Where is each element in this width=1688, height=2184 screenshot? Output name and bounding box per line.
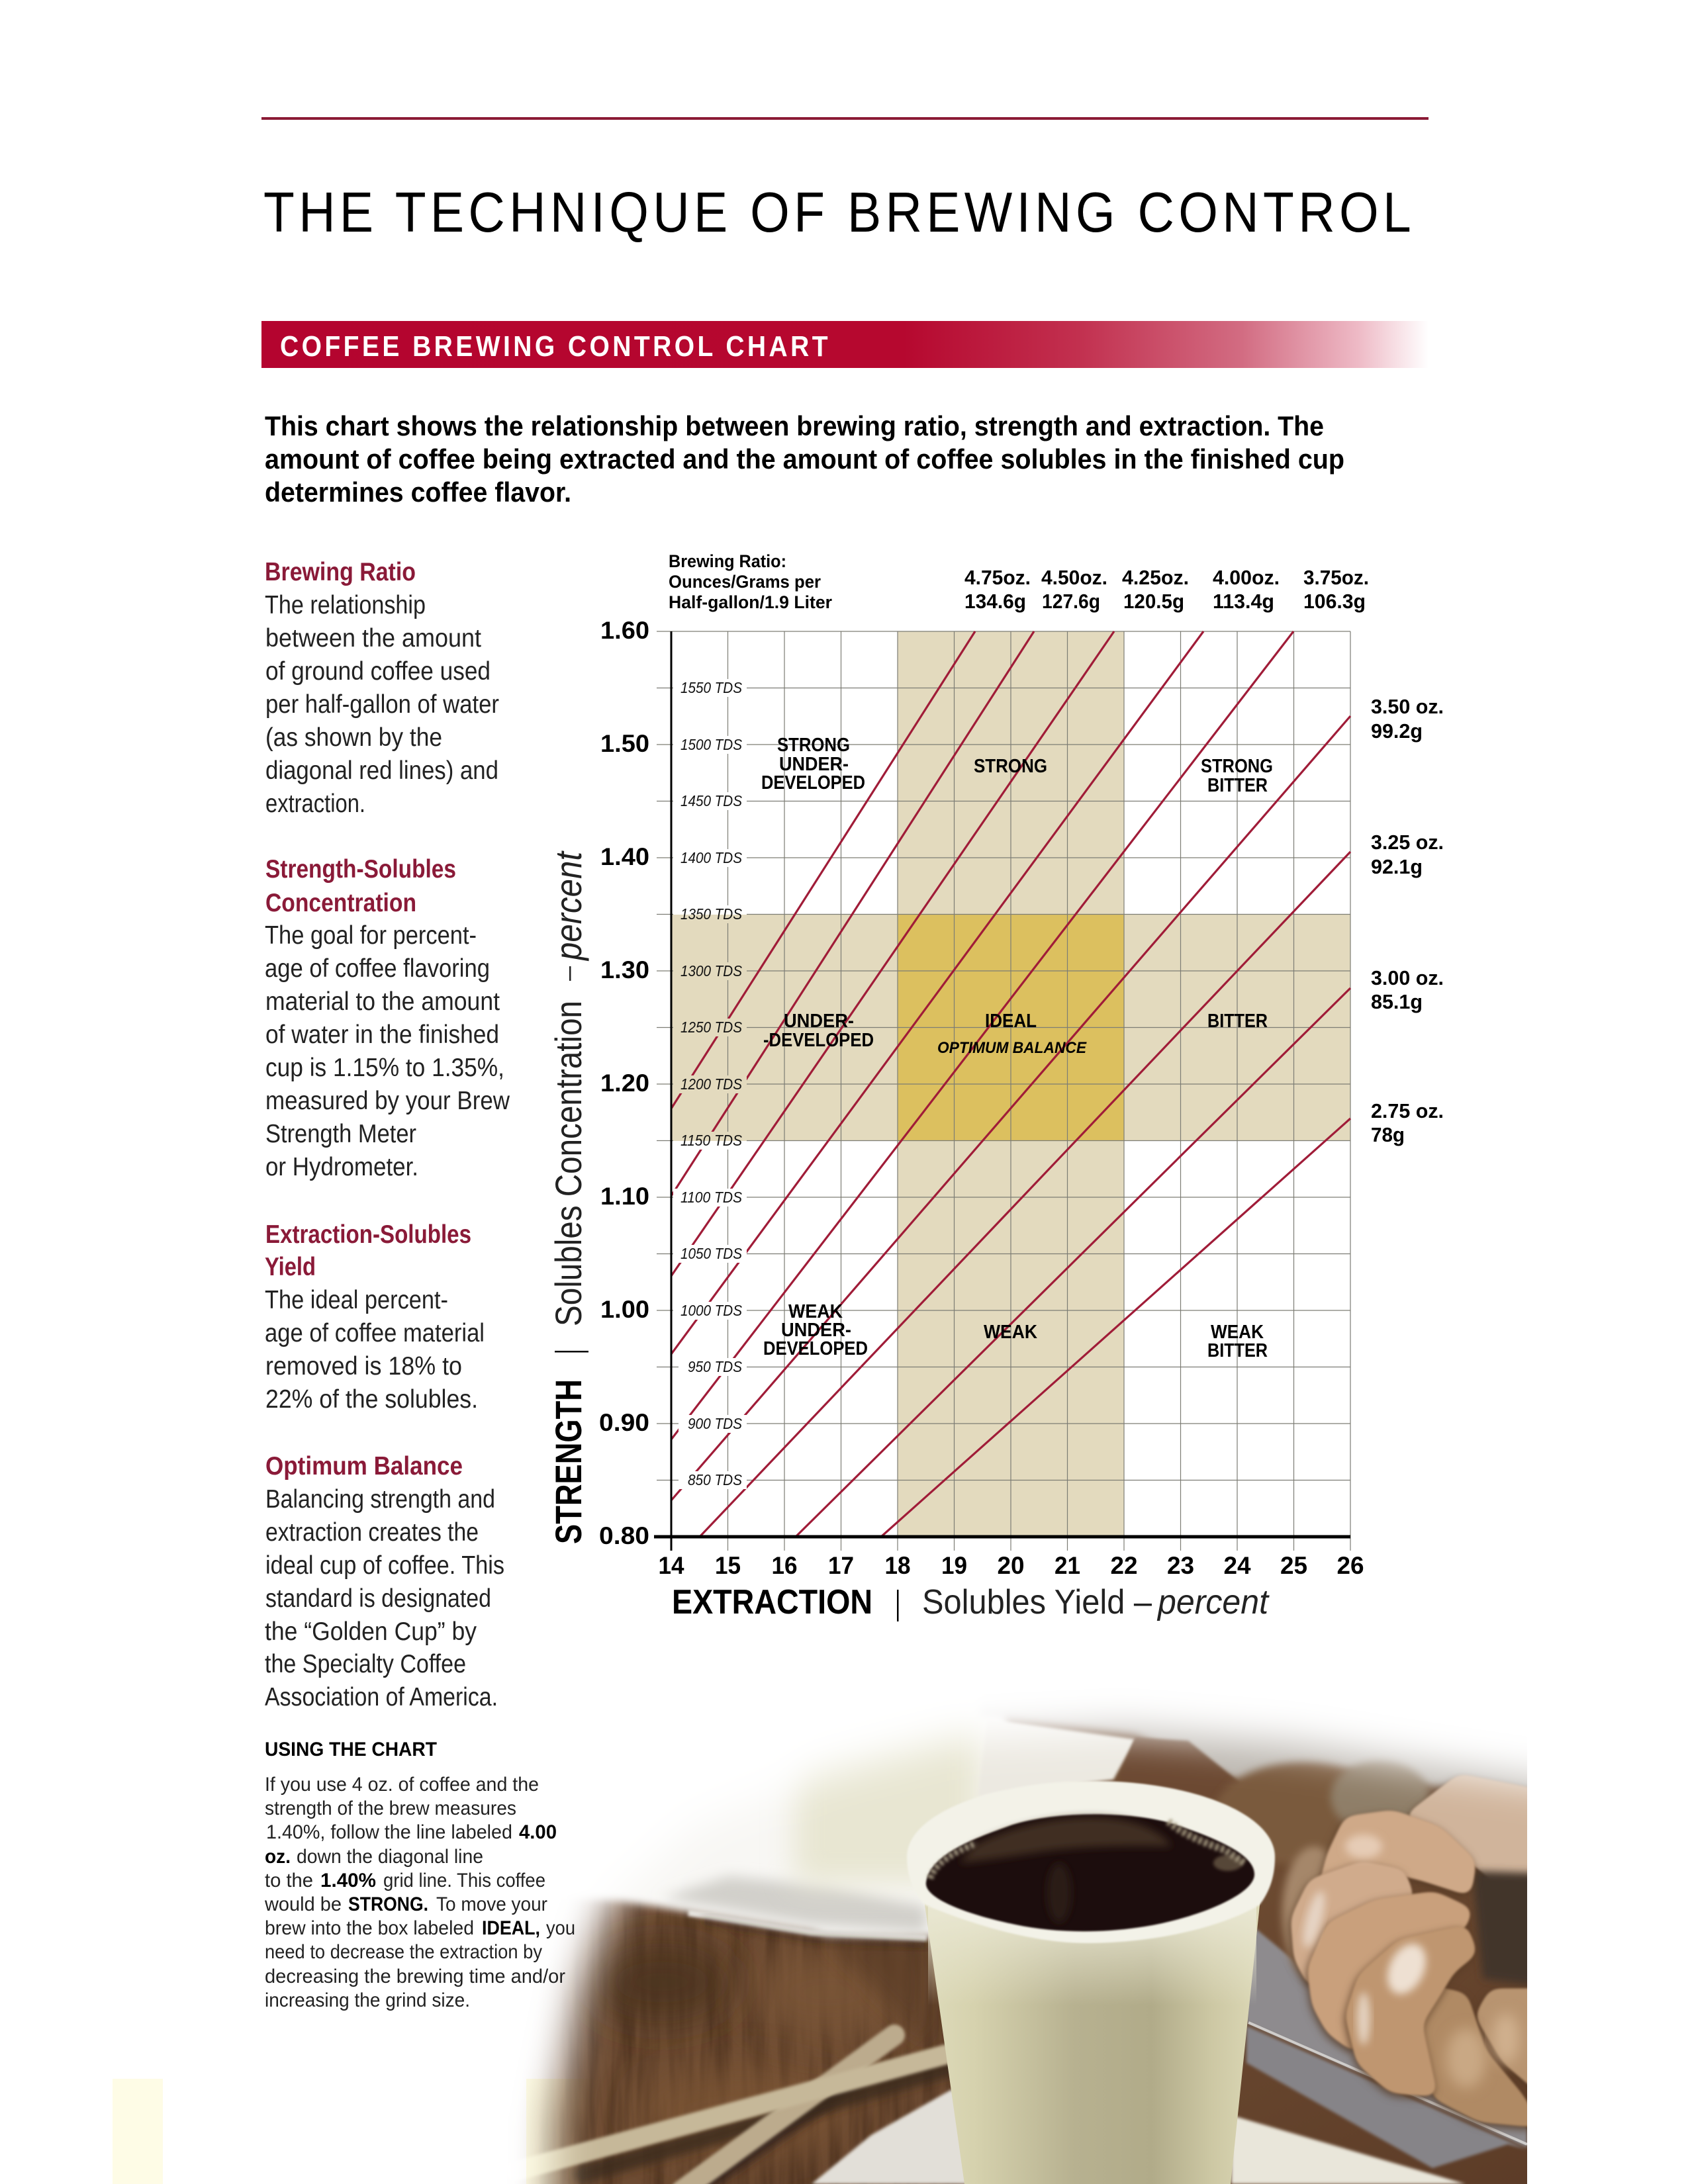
chart: extraction axis values: 21 bbox=[1055, 1552, 1080, 1579]
top rule bbox=[261, 117, 1429, 120]
photo: rear napkin bbox=[986, 1721, 1135, 1794]
chart: zone labels bbox=[761, 735, 1273, 1361]
instructions paragraph: increasing the grind size. bbox=[265, 1989, 470, 2011]
chart: right ratio labels: 3.00 oz. bbox=[1371, 966, 1444, 989]
heading: USING THE CHART bbox=[265, 1739, 437, 1760]
text block: optimum balance: standard is designated bbox=[265, 1584, 491, 1613]
chart: x axis title: percent bbox=[1156, 1583, 1270, 1621]
text block: extraction-solubles yield: 22% of the solubles. bbox=[265, 1385, 478, 1414]
chart: x axis title bbox=[672, 1583, 1270, 1621]
using the chart bbox=[264, 1739, 575, 2011]
chart: extraction axis values: 16 bbox=[772, 1552, 797, 1579]
chart: TDS scale labels: 1250 TDS bbox=[680, 1019, 743, 1036]
instructions paragraph: STRONG. bbox=[348, 1893, 428, 1915]
chart: TDS scale labels: 1550 TDS bbox=[680, 679, 743, 696]
instructions paragraph: oz. bbox=[265, 1846, 291, 1868]
cup rim bbox=[907, 1781, 1275, 1943]
chart: strength axis values: 1.20 bbox=[600, 1069, 649, 1097]
instructions paragraph: 1.40%, follow the line labeled bbox=[266, 1821, 512, 1843]
intro paragraph: amount of coffee being extracted and the amount of coffee solubles in the finished cup bbox=[265, 443, 1344, 475]
instructions paragraph: grid line. This coffee bbox=[383, 1870, 545, 1891]
photo: front glazed donut bbox=[1291, 1774, 1549, 2128]
chart: right ratio labels: 3.25 oz. bbox=[1371, 831, 1444, 854]
zone: under-developed bbox=[763, 1011, 874, 1051]
chart: extraction axis values: 25 bbox=[1280, 1552, 1307, 1579]
chart: strength axis values: 1.10 bbox=[600, 1183, 649, 1210]
instructions paragraph: need to decrease the extraction by bbox=[265, 1941, 542, 1963]
zone: strong under-developed: DEVELOPED bbox=[761, 772, 865, 794]
zone: weak under-developed: WEAK bbox=[788, 1301, 843, 1322]
text block: brewing ratio: extraction. bbox=[265, 790, 365, 818]
instructions paragraph: brew into the box labeled bbox=[265, 1917, 474, 1939]
chart: y axis title: STRENGTH bbox=[547, 1379, 589, 1544]
chart: extraction axis values: 24 bbox=[1223, 1552, 1251, 1579]
chart: extraction axis values: 20 bbox=[997, 1552, 1025, 1579]
chart: strength axis values: 0.80 bbox=[599, 1522, 649, 1549]
text block: strength-solubles concentration: or Hydrometer. bbox=[265, 1153, 418, 1181]
text block: optimum balance: extraction creates the bbox=[265, 1518, 479, 1547]
zone: strong bitter: BITTER bbox=[1207, 775, 1268, 796]
photo: stir sticks bbox=[516, 2035, 947, 2184]
text block: strength-solubles concentration: cup is 1.15% to 1.35%, bbox=[265, 1054, 504, 1082]
text block: strength-solubles concentration: Strength-Solubles bbox=[265, 855, 456, 884]
chart: top ratio labels: 4.25oz. bbox=[1122, 566, 1189, 589]
chart: strength axis values bbox=[599, 617, 649, 1549]
chart: top ratio labels: 4.75oz. bbox=[964, 566, 1031, 589]
instructions paragraph: 4.00 bbox=[519, 1821, 557, 1843]
zone: ideal: OPTIMUM BALANCE bbox=[937, 1039, 1087, 1057]
text block: extraction-solubles yield: Yield bbox=[265, 1253, 316, 1281]
chart: y axis title: percent bbox=[547, 850, 589, 962]
section banner: coffee brewing control chart bbox=[261, 321, 1429, 368]
photo: back napkin and saucer bbox=[585, 1715, 1008, 1948]
text block: optimum balance bbox=[265, 1452, 504, 1711]
chart: ideal zone bbox=[898, 915, 1124, 1141]
chart: top ratio labels: 134.6g bbox=[964, 590, 1026, 613]
instructions paragraph: If you use 4 oz. of coffee and the bbox=[265, 1774, 539, 1796]
text block: brewing ratio: diagonal red lines) and bbox=[265, 756, 498, 785]
chart: top ratio labels: 106.3g bbox=[1303, 590, 1366, 613]
chart: TDS scale labels: 1100 TDS bbox=[680, 1189, 743, 1206]
intro paragraph bbox=[265, 410, 1344, 508]
photo: rear wood patch bbox=[1124, 1737, 1238, 1783]
brewing control chart bbox=[547, 551, 1444, 1621]
photo: coffee cup and donuts bbox=[522, 1709, 1527, 2184]
coffee foam bbox=[1168, 1821, 1244, 1863]
instructions paragraph: strength of the brew measures bbox=[265, 1797, 516, 1819]
text block: strength-solubles concentration: The goal for percent- bbox=[265, 921, 477, 950]
chart: extraction axis values bbox=[658, 1552, 1364, 1579]
chart: TDS scale labels: 850 TDS bbox=[688, 1471, 743, 1488]
chart: TDS scale labels: 900 TDS bbox=[688, 1415, 743, 1432]
chart: brewing ratio header: Brewing Ratio: bbox=[669, 551, 786, 571]
text block: brewing ratio: Brewing Ratio bbox=[265, 558, 416, 586]
chart: brewing ratio header: Ounces/Grams per bbox=[669, 572, 821, 592]
chart: TDS scale labels: 1050 TDS bbox=[680, 1245, 743, 1262]
text block: brewing ratio: The relationship bbox=[265, 591, 426, 619]
zone: strong under-developed bbox=[761, 735, 865, 794]
text block: brewing ratio: per half-gallon of water bbox=[265, 690, 499, 719]
zone: weak bitter bbox=[1207, 1322, 1268, 1361]
chart: strength axis values: 0.90 bbox=[599, 1409, 649, 1436]
instructions paragraph: would be bbox=[264, 1893, 342, 1915]
photo: upper background wax paper bbox=[1009, 1704, 1527, 1791]
text block: extraction-solubles yield: age of coffee material bbox=[265, 1319, 485, 1347]
text block: optimum balance: Optimum Balance bbox=[265, 1452, 463, 1480]
instructions paragraph: To move your bbox=[436, 1893, 547, 1915]
text block: brewing ratio: between the amount bbox=[265, 624, 481, 653]
chart: right ratio labels: 78g bbox=[1371, 1123, 1405, 1146]
text block: brewing ratio bbox=[265, 558, 499, 818]
zone: strong bitter: STRONG bbox=[1201, 756, 1273, 777]
chart: TDS scale labels bbox=[673, 679, 747, 1489]
chart: right ratio labels: 85.1g bbox=[1371, 990, 1423, 1013]
text block: extraction-solubles yield: The ideal percent- bbox=[265, 1286, 448, 1314]
intro paragraph: This chart shows the relationship between brewing ratio, strength and extraction. The bbox=[265, 410, 1324, 441]
chart: top ratio labels: 120.5g bbox=[1123, 590, 1184, 613]
title: THE TECHNIQUE OF BREWING CONTROL bbox=[263, 181, 1415, 244]
instructions paragraph: decreasing the brewing time and/or bbox=[265, 1966, 565, 1987]
chart: strength axis values: 1.50 bbox=[600, 730, 649, 757]
chart: extraction axis values: 18 bbox=[884, 1552, 911, 1579]
zone: ideal: IDEAL bbox=[985, 1011, 1037, 1032]
chart: right ratio labels: 2.75 oz. bbox=[1371, 1099, 1444, 1122]
photo: front napkins bbox=[812, 2085, 1466, 2184]
chart: axes bbox=[654, 631, 1350, 1551]
chart: top ratio labels: 113.4g bbox=[1213, 590, 1274, 613]
text block: optimum balance: the Specialty Coffee bbox=[265, 1650, 466, 1678]
chart: right ratio labels: 92.1g bbox=[1371, 855, 1423, 878]
chart: y axis title bbox=[547, 850, 589, 1544]
chart: diagonal brewing ratio lines bbox=[671, 631, 1350, 1537]
instructions paragraph: IDEAL, bbox=[482, 1917, 540, 1939]
text block: strength-solubles concentration: of water in the finished bbox=[265, 1021, 499, 1049]
instructions paragraph: 1.40% bbox=[320, 1870, 376, 1891]
chart: brewing ratio header: Half-gallon/1.9 Liter bbox=[669, 592, 832, 612]
text block: extraction-solubles yield bbox=[265, 1220, 485, 1414]
zone: bitter: BITTER bbox=[1207, 1011, 1268, 1032]
text block: optimum balance: the “Golden Cup” by bbox=[265, 1617, 477, 1646]
chart: extraction axis values: 26 bbox=[1337, 1552, 1364, 1579]
chart: strength axis values: 1.30 bbox=[600, 956, 649, 983]
chart: top ratio labels: 4.50oz. bbox=[1041, 566, 1107, 589]
pale yellow swatch, lower left bbox=[113, 2079, 163, 2184]
text block: strength-solubles concentration: Strength Meter bbox=[265, 1120, 416, 1148]
chart: TDS scale labels: 1500 TDS bbox=[680, 736, 743, 753]
chart: extraction axis values: 22 bbox=[1111, 1552, 1137, 1579]
zone: under-developed: UNDER- bbox=[784, 1011, 854, 1032]
chart: TDS scale labels: 1150 TDS bbox=[680, 1132, 743, 1149]
chart: extraction axis values: 15 bbox=[715, 1552, 741, 1579]
section banner: coffee brewing control chart: COFFEE BREWING CONTROL CHART bbox=[280, 330, 831, 363]
text block: strength-solubles concentration: measured by your Brew bbox=[265, 1087, 510, 1115]
chart: extraction axis values: 23 bbox=[1167, 1552, 1194, 1579]
coffee surface bbox=[926, 1814, 1254, 1931]
zone: strong under-developed: STRONG bbox=[777, 735, 850, 756]
chart: TDS scale labels: 1400 TDS bbox=[680, 849, 743, 866]
photo: wax paper under donuts bbox=[1244, 1919, 1527, 2168]
chart: top ratio labels bbox=[964, 566, 1369, 613]
zone: strong: STRONG bbox=[974, 756, 1047, 777]
zone: weak bitter: WEAK bbox=[1211, 1322, 1264, 1343]
zone: strong bitter bbox=[1201, 756, 1273, 796]
instructions paragraph: you bbox=[546, 1917, 575, 1939]
chart: strength axis values: 1.00 bbox=[600, 1296, 649, 1323]
chart: TDS scale labels: 1300 TDS bbox=[680, 962, 743, 979]
text block: optimum balance: ideal cup of coffee. This bbox=[265, 1551, 504, 1580]
chart: x axis title: Solubles Yield – bbox=[922, 1583, 1152, 1621]
zone: ideal bbox=[937, 1011, 1087, 1057]
chart: brewing ratio header bbox=[669, 551, 832, 612]
photo: background cup bbox=[784, 1729, 982, 1892]
chart: x axis title: EXTRACTION bbox=[672, 1583, 872, 1621]
text block: brewing ratio: of ground coffee used bbox=[265, 657, 491, 686]
chart: TDS scale labels: 1000 TDS bbox=[680, 1302, 743, 1319]
text block: extraction-solubles yield: removed is 18% to bbox=[265, 1352, 462, 1381]
chart: extraction axis values: 19 bbox=[941, 1552, 967, 1579]
chart: tan zones bbox=[671, 631, 1350, 1537]
chart: right ratio labels bbox=[1371, 695, 1444, 1146]
zone: under-developed: -DEVELOPED bbox=[763, 1030, 874, 1051]
chart: top ratio labels: 127.6g bbox=[1042, 590, 1100, 613]
chart: TDS scale labels: 1200 TDS bbox=[680, 1075, 743, 1093]
chart: top ratio labels: 4.00oz. bbox=[1213, 566, 1280, 589]
zone: weak under-developed: DEVELOPED bbox=[763, 1338, 868, 1359]
chart: extraction axis values: 14 bbox=[658, 1552, 684, 1579]
chart: extraction axis values: 17 bbox=[828, 1552, 854, 1579]
zone: weak: WEAK bbox=[984, 1322, 1037, 1343]
chart: TDS scale labels: 1350 TDS bbox=[680, 905, 743, 923]
zone: weak under-developed bbox=[763, 1301, 868, 1359]
text block: extraction-solubles yield: Extraction-Solubles bbox=[265, 1220, 471, 1249]
chart: top ratio labels: 3.75oz. bbox=[1303, 566, 1369, 589]
text block: optimum balance: Balancing strength and bbox=[265, 1485, 495, 1514]
instructions paragraph: to the bbox=[265, 1870, 313, 1891]
instructions paragraph bbox=[264, 1774, 575, 2011]
text block: optimum balance: Association of America. bbox=[265, 1683, 498, 1711]
zone: weak under-developed: UNDER- bbox=[781, 1320, 851, 1341]
text block: brewing ratio: (as shown by the bbox=[265, 723, 442, 752]
photo: paper cup bbox=[907, 1781, 1275, 2184]
chart: strength axis values: 1.40 bbox=[600, 843, 649, 870]
photo: rear donuts bbox=[1215, 1760, 1430, 1979]
text block: strength-solubles concentration: age of coffee flavoring bbox=[265, 954, 490, 983]
instructions paragraph: down the diagonal line bbox=[297, 1846, 483, 1868]
chart: y axis title: Solubles Concentration bbox=[547, 1001, 589, 1326]
chart: right ratio labels: 99.2g bbox=[1371, 719, 1423, 743]
chart: TDS scale labels: 1450 TDS bbox=[680, 792, 743, 809]
text block: strength-solubles concentration: Concentration bbox=[265, 889, 416, 917]
text block: strength-solubles concentration bbox=[265, 855, 510, 1181]
chart: right ratio labels: 3.50 oz. bbox=[1371, 695, 1444, 718]
zone: strong under-developed: UNDER- bbox=[779, 754, 849, 775]
chart: TDS scale labels: 950 TDS bbox=[688, 1358, 743, 1375]
intro paragraph: determines coffee flavor. bbox=[265, 477, 571, 508]
zone: weak bitter: BITTER bbox=[1207, 1340, 1268, 1361]
photo: wood table bbox=[522, 1716, 1527, 2184]
cup body bbox=[922, 1886, 1262, 2184]
text block: strength-solubles concentration: material to the amount bbox=[265, 987, 500, 1016]
chart: strength axis values: 1.60 bbox=[600, 617, 649, 644]
